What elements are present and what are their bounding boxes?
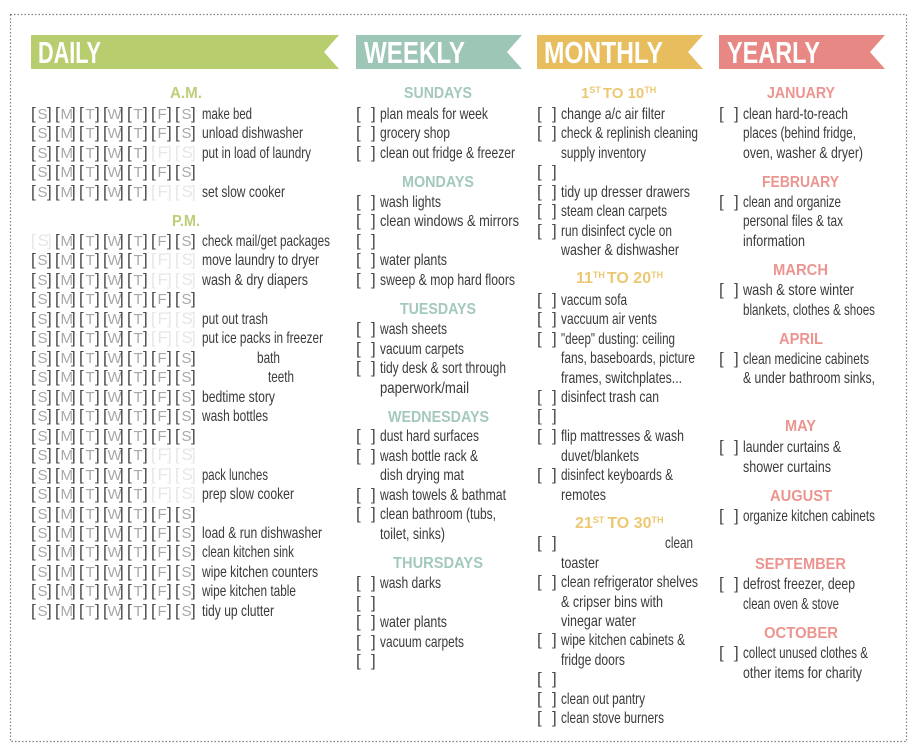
- checklist: wednesdays: dust hard surfaces: [380, 428, 479, 445]
- heading: january: JANUARY: [767, 85, 835, 102]
- checklist: wednesdays: wash bottle rack &: [379, 448, 478, 465]
- checklist: p.m. tasks: [S][M][T][W][T][F][S]: [31, 601, 196, 620]
- checklist: 11th to 20th: [537, 290, 695, 504]
- checklist: august: [719, 506, 875, 525]
- checklist: p.m. tasks: check mail/get packages: [202, 233, 330, 250]
- checklist: 11th to 20th: disinfect trash can: [561, 389, 659, 406]
- checklist: october: []: [719, 643, 739, 662]
- checklist: march: [719, 280, 875, 319]
- checklist: p.m. tasks: [S][M][T][W][T][F][S]: [31, 367, 196, 386]
- checklist: 21st to 30th: []: [537, 669, 557, 688]
- checklist: 21st to 30th: [537, 533, 698, 727]
- heading: february: FEBRUARY: [762, 174, 839, 191]
- checklist: p.m. tasks: tidy up clutter: [202, 603, 275, 620]
- checklist: tuesdays: []: [356, 339, 376, 358]
- checklist: p.m. tasks: load & run dishwasher: [202, 525, 323, 542]
- checklist: a.m. tasks: [31, 104, 311, 201]
- checklist: 1st to 10th: []: [537, 221, 557, 240]
- checklist: p.m. tasks: [S][M][T][W][T][F][S]: [31, 504, 196, 523]
- checklist: a.m. tasks: [S][M][T][W][T][F][S]: [31, 162, 196, 181]
- checklist: p.m. tasks: [S][M][T][W][T][F][S]: [31, 426, 196, 445]
- heading: august: AUGUST: [770, 488, 832, 505]
- checklist: p.m. tasks: put ice packs in freezer: [202, 330, 323, 347]
- checklist: thursdays: []: [356, 612, 376, 631]
- checklist: tuesdays: vacuum carpets: [380, 341, 464, 358]
- checklist: p.m. tasks: wash bottles: [201, 408, 268, 425]
- checklist: 11th to 20th: []: [537, 426, 557, 445]
- checklist: mondays: []: [356, 270, 376, 289]
- heading: april: APRIL: [779, 331, 823, 348]
- checklist: thursdays: vacuum carpets: [380, 634, 464, 651]
- heading: march: MARCH: [773, 262, 828, 279]
- checklist: wednesdays: wash towels & bathmat: [379, 487, 506, 504]
- checklist: 21st to 30th: clean stove burners: [561, 710, 664, 727]
- checklist: thursdays: []: [356, 651, 376, 670]
- checklist: 11th to 20th: vaccum sofa: [561, 292, 627, 309]
- checklist: august: []: [719, 506, 739, 525]
- checklist: tuesdays: []: [356, 319, 376, 338]
- checklist: p.m. tasks: [S][M][T][W][T][F][S]: [31, 309, 196, 328]
- checklist: 1st to 10th: []: [537, 182, 557, 201]
- checklist: mondays: []: [356, 231, 376, 250]
- checklist: p.m. tasks: wipe kitchen counters: [201, 564, 318, 581]
- checklist: january: []: [719, 104, 739, 123]
- checklist: thursdays: []: [356, 573, 376, 592]
- banner: daily: [31, 35, 339, 70]
- heading: september: SEPTEMBER: [755, 556, 846, 573]
- heading: 11th to 20th: TH: [651, 270, 663, 280]
- heading: tuesdays: TUESDAYS: [400, 301, 476, 318]
- checklist: p.m. tasks: [31, 231, 330, 620]
- checklist: april: clean medicine cabinets: [743, 351, 869, 368]
- checklist: 21st to 30th: clean refrigerator shelves: [561, 574, 698, 591]
- checklist: february: []: [719, 192, 739, 211]
- checklist: 11th to 20th: fans, baseboards, picture: [561, 350, 695, 367]
- banner: yearly: YEARLY: [727, 35, 820, 70]
- panel: yearly: [719, 35, 885, 682]
- checklist: a.m. tasks: [S][M][T][W][T][F][S]: [31, 182, 196, 201]
- checklist: wednesdays: []: [356, 504, 376, 523]
- checklist: 11th to 20th: disinfect keyboards &: [561, 467, 673, 484]
- checklist: a.m. tasks: put in load of laundry: [202, 145, 311, 162]
- checklist: mondays: clean windows & mirrors: [380, 213, 519, 230]
- checklist: 1st to 10th: change a/c air filter: [561, 106, 666, 123]
- checklist: 1st to 10th: washer & dishwasher: [560, 242, 680, 259]
- checklist: p.m. tasks: pack lunches: [202, 467, 268, 484]
- checklist: mondays: []: [356, 211, 376, 230]
- checklist: thursdays: []: [356, 632, 376, 651]
- checklist: p.m. tasks: [S][M][T][W][T][F][S]: [31, 387, 196, 406]
- checklist: 11th to 20th: frames, switchplates...: [561, 370, 682, 387]
- banner: weekly: WEEKLY: [364, 35, 465, 70]
- checklist: 21st to 30th: clean out pantry: [561, 691, 645, 708]
- checklist: p.m. tasks: prep slow cooker: [202, 486, 295, 503]
- checklist: 11th to 20th: []: [537, 329, 557, 348]
- checklist: 21st to 30th: & cripser bins with: [561, 594, 663, 611]
- checklist: february: [719, 192, 843, 250]
- checklist: wednesdays: []: [356, 426, 376, 445]
- checklist: a.m. tasks: [S][M][T][W][T][F][S]: [31, 123, 196, 142]
- checklist: 1st to 10th: []: [537, 162, 557, 181]
- checklist: 21st to 30th: []: [537, 630, 557, 649]
- checklist: october: collect unused clothes &: [743, 645, 868, 662]
- heading: 21st to 30th: TO 30: [607, 515, 652, 532]
- checklist: thursdays: water plants: [379, 614, 447, 631]
- checklist: 1st to 10th: [537, 104, 698, 259]
- checklist: tuesdays: []: [356, 358, 376, 377]
- checklist: p.m. tasks: bath: [257, 350, 280, 367]
- checklist: p.m. tasks: [S][M][T][W][T][F][S]: [31, 231, 196, 250]
- checklist: 21st to 30th: wipe kitchen cabinets &: [560, 632, 685, 649]
- checklist: sundays: [356, 104, 516, 162]
- checklist: 11th to 20th: []: [537, 406, 557, 425]
- panel: weekly: [356, 35, 522, 670]
- checklist: 11th to 20th: []: [537, 465, 557, 484]
- checklist: wednesdays: []: [356, 485, 376, 504]
- checklist: mondays: sweep & mop hard floors: [380, 272, 515, 289]
- checklist: february: information: [743, 233, 805, 250]
- checklist: 11th to 20th: "deep" dusting: ceiling: [561, 331, 675, 348]
- checklist: p.m. tasks: [S][M][T][W][T][F][S]: [31, 484, 196, 503]
- checklist: mondays: []: [356, 250, 376, 269]
- checklist: may: []: [719, 437, 739, 456]
- panel: daily: [31, 35, 339, 620]
- banner: daily: DAILY: [38, 35, 101, 70]
- checklist: 11th to 20th: remotes: [561, 487, 606, 504]
- checklist: wednesdays: [356, 426, 506, 543]
- checklist: march: wash & store winter: [742, 282, 855, 299]
- heading: 21st to 30th: 21: [575, 515, 593, 532]
- checklist: p.m. tasks: [S][M][T][W][T][F][S]: [31, 581, 196, 600]
- checklist: 1st to 10th: []: [537, 104, 557, 123]
- heading: 21st to 30th: ST: [593, 515, 605, 525]
- panel: monthly: [537, 35, 703, 727]
- checklist: a.m. tasks: [S][M][T][W][T][F][S]: [31, 143, 196, 162]
- checklist: a.m. tasks: make bed: [202, 106, 252, 123]
- heading: thursdays: THURSDAYS: [393, 555, 483, 572]
- checklist: january: clean hard-to-reach: [743, 106, 848, 123]
- heading: p.m.: P.M.: [172, 213, 200, 230]
- checklist: thursdays: wash darks: [379, 575, 441, 592]
- checklist: p.m. tasks: [S][M][T][W][T][F][S]: [31, 289, 196, 308]
- heading: 1st to 10th: TH: [644, 85, 656, 95]
- heading: a.m.: A.M.: [170, 85, 202, 102]
- checklist: sundays: grocery shop: [380, 125, 450, 142]
- checklist: wednesdays: toilet, sinks): [380, 526, 445, 543]
- checklist: p.m. tasks: [S][M][T][W][T][F][S]: [31, 542, 196, 561]
- checklist: 21st to 30th: []: [537, 689, 557, 708]
- checklist: wednesdays: clean bathroom (tubs,: [380, 506, 496, 523]
- checklist: p.m. tasks: [S][M][T][W][T][F][S]: [31, 465, 196, 484]
- checklist: 21st to 30th: clean: [665, 535, 693, 552]
- checklist: p.m. tasks: [S][M][T][W][T][F][S]: [31, 250, 196, 269]
- checklist: 11th to 20th: vaccuum air vents: [561, 311, 657, 328]
- heading: wednesdays: WEDNESDAYS: [388, 409, 489, 426]
- checklist: january: oven, washer & dryer): [743, 145, 863, 162]
- checklist: january: [719, 104, 863, 162]
- checklist: january: places (behind fridge,: [743, 125, 856, 142]
- checklist: p.m. tasks: wipe kitchen table: [201, 583, 296, 600]
- heading: 1st to 10th: ST: [589, 85, 601, 95]
- checklist: p.m. tasks: teeth: [268, 369, 294, 386]
- checklist: october: other items for charity: [743, 665, 862, 682]
- checklist: tuesdays: [356, 319, 506, 397]
- checklist: a.m. tasks: set slow cooker: [202, 184, 286, 201]
- checklist: september: [719, 574, 855, 613]
- checklist: p.m. tasks: wash & dry diapers: [201, 272, 308, 289]
- checklist: 21st to 30th: []: [537, 572, 557, 591]
- checklist: mondays: [356, 192, 519, 289]
- heading: 11th to 20th: 11: [576, 270, 593, 287]
- heading: 1st to 10th: TO 10: [603, 85, 644, 102]
- checklist: 1st to 10th: steam clean carpets: [561, 203, 667, 220]
- checklist: tuesdays: wash sheets: [379, 321, 447, 338]
- checklist: thursdays: [356, 573, 464, 670]
- checklist: 21st to 30th: toaster: [561, 555, 600, 572]
- checklist: 1st to 10th: tidy up dresser drawers: [561, 184, 690, 201]
- checklist: p.m. tasks: clean kitchen sink: [202, 544, 295, 561]
- checklist: wednesdays: dish drying mat: [380, 467, 464, 484]
- checklist: 1st to 10th: supply inventory: [561, 145, 646, 162]
- checklist: 1st to 10th: run disinfect cycle on: [561, 223, 672, 240]
- heading: mondays: MONDAYS: [402, 174, 474, 191]
- checklist: p.m. tasks: move laundry to dryer: [202, 252, 320, 269]
- checklist: p.m. tasks: [S][M][T][W][T][F][S]: [31, 406, 196, 425]
- checklist: mondays: []: [356, 192, 376, 211]
- checklist: 11th to 20th: []: [537, 387, 557, 406]
- banner: monthly: MONTHLY: [544, 35, 663, 70]
- heading: may: MAY: [785, 418, 816, 435]
- checklist: tuesdays: paperwork/mail: [380, 380, 469, 397]
- checklist: may: launder curtains &: [743, 439, 841, 456]
- checklist: sundays: []: [356, 123, 376, 142]
- checklist: may: shower curtains: [743, 459, 831, 476]
- checklist: p.m. tasks: [S][M][T][W][T][F][S]: [31, 523, 196, 542]
- heading: 21st to 30th: TH: [651, 515, 663, 525]
- checklist: 11th to 20th: duvet/blankets: [561, 448, 639, 465]
- checklist: 21st to 30th: []: [537, 533, 557, 552]
- checklist: february: personal files & tax: [743, 213, 843, 230]
- checklist: september: defrost freezer, deep: [743, 576, 855, 593]
- checklist: 21st to 30th: fridge doors: [561, 652, 625, 669]
- checklist: 1st to 10th: []: [537, 201, 557, 220]
- checklist: p.m. tasks: [S][M][T][W][T][F][S]: [31, 445, 196, 464]
- heading: october: OCTOBER: [764, 625, 838, 642]
- checklist: september: clean oven & stove: [743, 596, 839, 613]
- checklist: 1st to 10th: []: [537, 123, 557, 142]
- checklist: tuesdays: tidy desk & sort through: [380, 360, 506, 377]
- checklist: mondays: water plants: [379, 252, 447, 269]
- checklist: p.m. tasks: bedtime story: [202, 389, 275, 406]
- checklist: april: & under bathroom sinks,: [743, 370, 875, 387]
- checklist: april: [719, 349, 875, 387]
- checklist: 21st to 30th: []: [537, 708, 557, 727]
- checklist: p.m. tasks: [S][M][T][W][T][F][S]: [31, 270, 196, 289]
- checklist: march: []: [719, 280, 739, 299]
- checklist: p.m. tasks: [S][M][T][W][T][F][S]: [31, 348, 196, 367]
- checklist: p.m. tasks: [S][M][T][W][T][F][S]: [31, 562, 196, 581]
- checklist: october: [719, 643, 868, 682]
- checklist: 1st to 10th: check & replinish cleaning: [561, 125, 698, 142]
- checklist: september: []: [719, 574, 739, 593]
- checklist: a.m. tasks: unload dishwasher: [202, 125, 304, 142]
- heading: sundays: SUNDAYS: [404, 85, 472, 102]
- checklist: thursdays: []: [356, 593, 376, 612]
- checklist: sundays: clean out fridge & freezer: [380, 145, 516, 162]
- checklist: february: clean and organize: [743, 194, 841, 211]
- checklist: a.m. tasks: [S][M][T][W][T][F][S]: [31, 104, 196, 123]
- checklist: wednesdays: []: [356, 446, 376, 465]
- checklist: 11th to 20th: []: [537, 309, 557, 328]
- checklist: 11th to 20th: []: [537, 290, 557, 309]
- checklist: 21st to 30th: vinegar water: [561, 613, 637, 630]
- checklist: p.m. tasks: [S][M][T][W][T][F][S]: [31, 328, 196, 347]
- checklist: april: []: [719, 349, 739, 368]
- checklist: sundays: []: [356, 143, 376, 162]
- checklist: mondays: wash lights: [379, 194, 441, 211]
- checklist: sundays: plan meals for week: [380, 106, 489, 123]
- heading: 11th to 20th: TO 20: [607, 270, 651, 287]
- heading: 11th to 20th: TH: [593, 270, 605, 280]
- checklist: 11th to 20th: flip mattresses & wash: [561, 428, 684, 445]
- heading: 1st to 10th: 1: [581, 85, 589, 102]
- checklist: p.m. tasks: put out trash: [202, 311, 268, 328]
- checklist: may: [719, 437, 841, 476]
- checklist: sundays: []: [356, 104, 376, 123]
